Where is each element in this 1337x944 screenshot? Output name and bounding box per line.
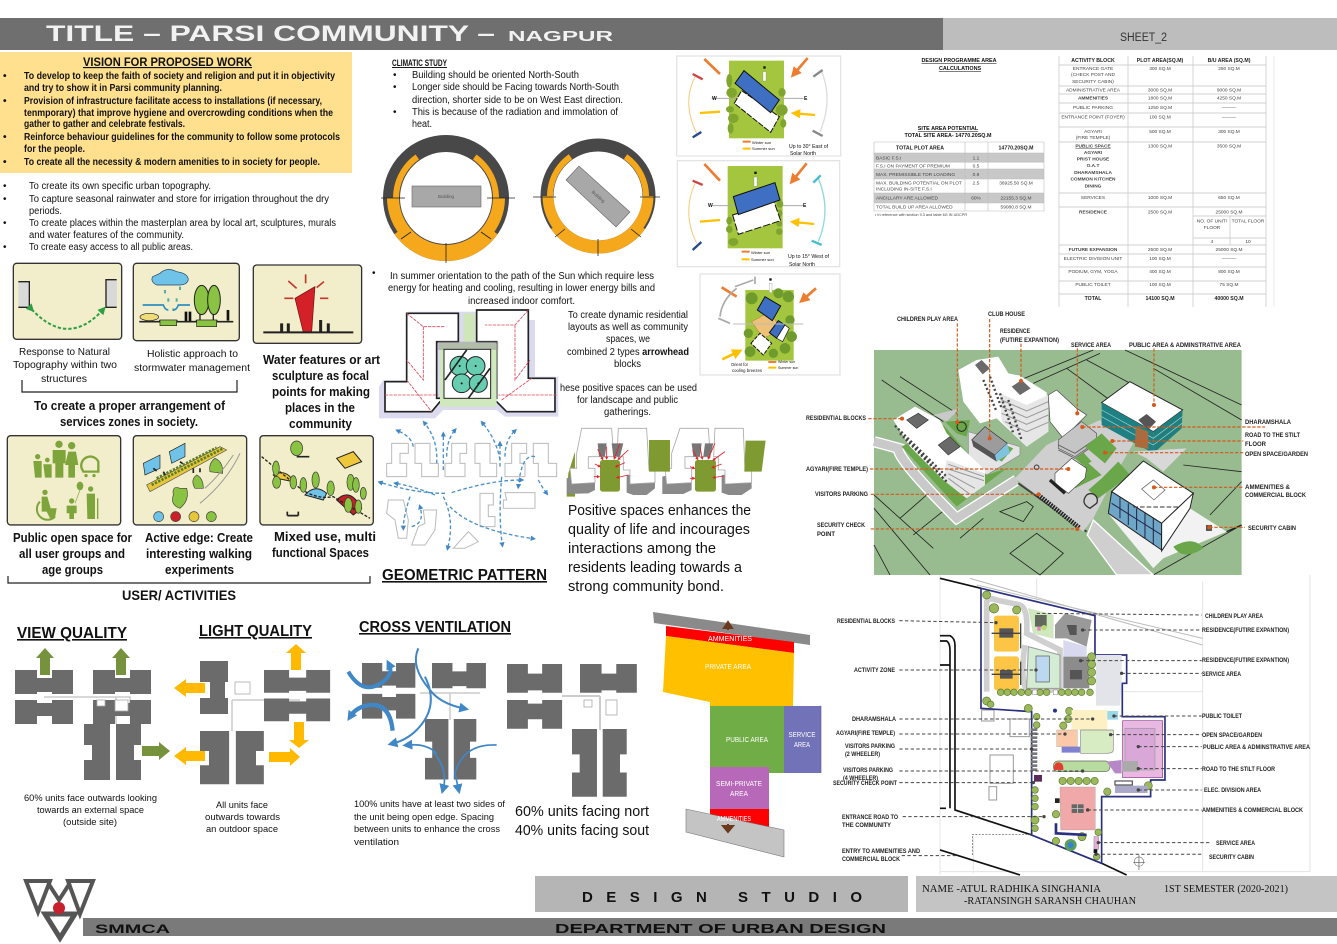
heading: services zones: To create a proper arrangement of bbox=[34, 399, 226, 413]
text: positive spaces benefit: strong community bond. bbox=[568, 579, 724, 595]
text block: urban objectives: • bbox=[3, 194, 7, 205]
heading: site area potential: TOTAL SITE AREA- 14770.20SQ.M bbox=[905, 133, 992, 139]
table: activity block areas: ENTRANCE POINT (FOYER) bbox=[1061, 114, 1125, 120]
table: activity block areas: 40000 SQ.M bbox=[1214, 296, 1244, 302]
diagram: unit facing bbox=[507, 664, 637, 797]
text: stormwater caption: stormwater management bbox=[134, 362, 250, 374]
residential tower cluster, right bbox=[958, 357, 1048, 447]
sketch: arrowhead block plan bbox=[379, 310, 558, 418]
labels: site master plan: PUBLIC TOILET bbox=[1202, 714, 1242, 720]
heading: cross ventilation: CROSS VENTILATION bbox=[359, 619, 511, 636]
diagram: site zoning: AREA bbox=[794, 742, 810, 749]
diagram: 3D axonometric view bbox=[868, 319, 1265, 575]
labels: 3D view: SERVICE AREA bbox=[1071, 343, 1112, 349]
footer bar: DEPARTMENT OF URBAN DESIGN bbox=[555, 921, 886, 936]
title bar: TITLE – PARSI COMMUNITY – bbox=[46, 21, 495, 46]
footer bar bbox=[83, 918, 1337, 936]
text block: urban objectives: • bbox=[3, 242, 7, 253]
table: activity block areas: DINING bbox=[1085, 184, 1102, 190]
text: natural topography caption: Topography within two bbox=[13, 359, 117, 371]
labels: 3D view: CHILDREN PLAY AREA bbox=[897, 317, 959, 323]
text: water features caption: Water features or art bbox=[263, 353, 381, 367]
text: positive spaces benefit: interactions among the bbox=[568, 541, 716, 557]
table: activity block areas: NO. OF UNIT/ bbox=[1197, 218, 1228, 224]
diagram: solar orientation 30 east: Winter sun bbox=[752, 140, 771, 145]
labels: site master plan: ELEC. DIVISION AREA bbox=[1204, 788, 1262, 794]
table: site area potential: TOTAL BUILD UP AREA ALLOWED bbox=[876, 204, 953, 210]
table: site area potential: BASIC F.S.I bbox=[876, 156, 901, 162]
labels: site master plan: SECURITY CHECK POINT bbox=[833, 781, 897, 787]
table: activity block areas: 1800 SQ.M bbox=[1148, 96, 1172, 102]
table: activity block areas: 9000 SQ.M bbox=[1217, 88, 1241, 94]
diagram: orient for cooling breezes bbox=[700, 274, 840, 375]
diagram: solar orientation 15 west: Up to 15° West of bbox=[788, 254, 830, 260]
table: activity block areas: 3500 SQ.M bbox=[1217, 144, 1241, 150]
text: positive spaces benefit: residents leading towards a bbox=[568, 560, 743, 576]
panel: vision for proposed work: • bbox=[3, 132, 7, 143]
text block: climatic study: • bbox=[393, 82, 397, 93]
diagram: site zoning: AMMENITIES bbox=[708, 636, 752, 643]
diagram: site zoning: PRIVATE AREA bbox=[705, 664, 751, 671]
labels: 3D view: FLOOR bbox=[1245, 442, 1267, 448]
heading: design programme area calculations: CALCULATIONS bbox=[939, 66, 981, 72]
table: activity block areas: AMMENITIES bbox=[1078, 96, 1109, 102]
text: cross ventilation caption: 100% units have at least two sides of bbox=[354, 799, 505, 810]
text block: climatic study bbox=[392, 58, 623, 130]
table: activity block areas: 300 SQ.M bbox=[1218, 129, 1240, 135]
labels: site master plan: AMMENITIES & COMMERCIAL BLOCK bbox=[1202, 808, 1304, 814]
diagram: solar orientation 30 east: W bbox=[712, 96, 717, 102]
text: user groups caption: Public open space for bbox=[13, 531, 132, 545]
text: summer orientation: increased indoor comfort. bbox=[468, 296, 575, 307]
table: activity block areas: ENTRANCE GATE bbox=[1073, 66, 1113, 72]
labels: 3D view: AMMENITIES & bbox=[1245, 485, 1291, 491]
heading: site area potential: SITE AREA POTENTIAL bbox=[918, 126, 979, 132]
labels: site master plan: (4 WHEELER) bbox=[843, 776, 878, 782]
chart: sun path orientation 2 bbox=[533, 145, 660, 256]
text: positive spaces benefit: Positive spaces enhances the bbox=[568, 503, 751, 519]
panel: student names and semester: NAME -ATUL RADHIKA SINGHANIA bbox=[922, 883, 1101, 895]
title bar bbox=[0, 18, 1337, 50]
text: dynamic layouts: combined 2 types arrowhead bbox=[567, 347, 689, 358]
text: dynamic layouts: To create dynamic residential bbox=[568, 310, 688, 321]
table: site area potential: • In reference with section 9.3 and table 6G IN UDCPR bbox=[875, 213, 967, 217]
labels: 3D view: RESIDENCE bbox=[1000, 329, 1030, 335]
text: stormwater caption: Holistic approach to bbox=[147, 348, 238, 360]
table: activity block areas: 300 SQ.M bbox=[1149, 66, 1171, 72]
heading: view quality: VIEW QUALITY bbox=[17, 625, 127, 642]
table: activity block areas: 2500 SQ.M bbox=[1148, 210, 1172, 216]
heading: design programme area calculations: DESIGN PROGRAMME AREA bbox=[922, 58, 997, 64]
labels: site master plan: SERVICE AREA bbox=[1216, 841, 1256, 847]
diagram: geometric pattern flow bbox=[380, 423, 557, 548]
text: active edge caption: Active edge: Create bbox=[145, 531, 253, 545]
icon: sculpture card bbox=[253, 265, 362, 343]
table: activity block areas: (CHECK POST AND bbox=[1071, 72, 1115, 78]
table: site area potential: 0.9 bbox=[973, 172, 980, 178]
chart: sun path orientation 1: Building bbox=[438, 194, 455, 199]
table: site area potential: 14770.20SQ.M bbox=[999, 146, 1033, 152]
diagram: solar orientation 30 east bbox=[677, 56, 841, 157]
chart: sun path orientation 2: Building bbox=[591, 189, 606, 204]
heading: design programme area calculations bbox=[922, 58, 997, 72]
diagram: solar orientation 30 east: Solar North bbox=[790, 151, 816, 157]
text: cross ventilation caption: between units to enhance the cross bbox=[354, 824, 500, 835]
text block: climatic study: direction, shorter side to be on West East direction. bbox=[412, 95, 623, 106]
diagram: site zoning: AMMENITIES bbox=[717, 816, 751, 823]
panel: student names and semester: -RATANSINGH SARANSH CHAUHAN bbox=[964, 895, 1136, 907]
table: activity block areas: 100 SQ.M bbox=[1149, 256, 1171, 262]
logo bbox=[26, 881, 93, 938]
table: activity block areas: 500 SQ.M bbox=[1149, 129, 1171, 135]
panel: vision for proposed work bbox=[0, 52, 352, 173]
heading: geometric pattern: GEOMETRIC PATTERN bbox=[382, 567, 547, 584]
text block: climatic study: Building should be oriented North-South bbox=[412, 70, 579, 81]
text: unit facing percentages bbox=[515, 803, 650, 839]
labels: site master plan: VISITORS PARKING bbox=[845, 744, 895, 750]
table: site area potential: MAX. BUILDING POTENTIAL ON PLOT bbox=[876, 180, 962, 186]
text block: climatic study: heat. bbox=[412, 119, 432, 130]
panel: student names and semester bbox=[916, 876, 1337, 912]
table: site area potential: 60% bbox=[971, 196, 982, 202]
labels: 3D view bbox=[806, 312, 1308, 538]
labels: 3D view: PUBLIC AREA & ADMINSTRATIVE AREA bbox=[1129, 343, 1242, 349]
text: light quality caption: All units face bbox=[216, 800, 268, 811]
text: light quality caption bbox=[205, 800, 280, 835]
table: activity block areas: ADMINISTRATIVE AREA bbox=[1066, 88, 1121, 94]
table: activity block areas bbox=[1059, 56, 1274, 307]
table: activity block areas: ——— bbox=[1222, 116, 1236, 120]
table: activity block areas: 1000 SQ.M bbox=[1148, 195, 1172, 201]
labels: site master plan: PUBLIC AREA & ADMINSTRATIVE AREA bbox=[1203, 745, 1311, 751]
text: positive spaces use: hese positive spaces can be used bbox=[560, 383, 697, 394]
table: activity block areas: ——— bbox=[1222, 257, 1236, 262]
text: dynamic layouts: blocks bbox=[614, 359, 641, 370]
diagram: orient for cooling breezes: Winter sun bbox=[778, 360, 795, 364]
labels: site master plan: OPEN SPACE/GARDEN bbox=[1202, 733, 1262, 739]
text: water features caption: places in the bbox=[285, 401, 355, 415]
table: activity block areas: 25000 SQ.M bbox=[1216, 210, 1242, 216]
residential tower cluster, left bbox=[893, 407, 985, 498]
icon: natural topography card bbox=[13, 263, 122, 339]
heading: services zones: services zones in society. bbox=[60, 415, 198, 429]
text: dynamic layouts: layouts as well as community bbox=[568, 322, 688, 333]
text: cross ventilation caption: the unit being open edge. Spacing bbox=[354, 812, 494, 823]
text: user groups caption: age groups bbox=[42, 563, 103, 577]
text: positive spaces use: gatherings. bbox=[604, 407, 651, 418]
labels: 3D view: VISITORS PARKING bbox=[815, 492, 868, 498]
labels: 3D view: AGYARI(FIRE TEMPLE) bbox=[806, 467, 868, 473]
chart: sun path orientation 1 bbox=[381, 144, 515, 263]
table: activity block areas: ACTIVITY BLOCK bbox=[1071, 58, 1115, 64]
text: active edge caption: interesting walking bbox=[146, 547, 252, 561]
table: activity block areas: DHARAMSHALA bbox=[1074, 170, 1112, 176]
labels: site master plan: SERVICE AREA bbox=[1202, 672, 1242, 678]
heading: site area potential bbox=[905, 126, 992, 139]
labels: site master plan: CHILDREN PLAY AREA bbox=[1205, 614, 1264, 620]
text: view quality caption: 60% units face outwards looking bbox=[24, 793, 157, 804]
table: activity block areas: PUBLIC TOILET bbox=[1075, 282, 1111, 288]
panel: design studio: DESIGN STUDIO bbox=[582, 889, 862, 906]
table: activity block areas: 800 SQ.M bbox=[1218, 269, 1240, 275]
text block: urban objectives: • bbox=[3, 181, 7, 192]
diagram: site zoning: SEMI-PRIVATE bbox=[716, 781, 762, 788]
diagram: orient for cooling breezes: Orient for bbox=[731, 362, 748, 367]
text: water features caption bbox=[263, 353, 381, 431]
text: natural topography caption bbox=[13, 346, 117, 385]
table: activity block areas: FLOOR bbox=[1204, 225, 1221, 231]
table: site area potential: 22155.3 SQ.M bbox=[1001, 196, 1031, 202]
text: positive spaces benefit bbox=[568, 503, 751, 595]
labels: 3D view: ROAD TO THE STILT bbox=[1245, 433, 1300, 439]
diagram: solar orientation 30 east: Up to 30° East of bbox=[789, 144, 829, 150]
text: dynamic layouts bbox=[567, 310, 689, 370]
text: light quality caption: outwards towards bbox=[205, 812, 280, 823]
labels: 3D view: COMMERCIAL BLOCK bbox=[1245, 493, 1307, 499]
labels: site master plan: DHARAMSHALA bbox=[852, 717, 897, 723]
labels: site master plan: VISITORS PARKING bbox=[843, 768, 893, 774]
table: activity block areas: 650 SQ.M bbox=[1218, 195, 1240, 201]
diagram: site zoning: AREA bbox=[730, 791, 748, 798]
panel: vision for proposed work: • bbox=[3, 96, 7, 107]
icon: active edge card bbox=[133, 436, 247, 525]
icon: mixed use card bbox=[260, 436, 373, 525]
text block: urban objectives: periods. bbox=[29, 206, 62, 217]
text block: urban objectives: To capture seasonal rainwater and store for irrigation throughout the dry bbox=[29, 194, 329, 205]
table: site area potential: ANCILLARY ARE ALLOWED bbox=[876, 196, 938, 202]
diagram: orient for cooling breezes: Summer sun bbox=[778, 366, 798, 370]
table: activity block areas: 10 bbox=[1245, 239, 1251, 245]
labels: site master plan: THE COMMUNITY bbox=[842, 823, 891, 829]
labels: 3D view: (FUTIRE EXPANTION) bbox=[1000, 338, 1059, 344]
table: activity block areas: 4250 SQ.M bbox=[1217, 96, 1241, 102]
table: activity block areas: 4 bbox=[1211, 239, 1214, 245]
text: active edge caption bbox=[145, 531, 253, 577]
labels: site master plan: RESIDENCE(FUTIRE EXPANTION) bbox=[1202, 628, 1289, 634]
panel: vision for proposed work: • bbox=[3, 157, 7, 168]
text block: climatic study: This is because of the radiation and immolation of bbox=[412, 107, 618, 118]
labels: site master plan: ENTRANCE ROAD TO bbox=[842, 815, 898, 821]
labels: 3D view: CLUB HOUSE bbox=[988, 312, 1025, 318]
diagram: view quality bbox=[15, 648, 170, 780]
text block: urban objectives: To create easy access to all public areas. bbox=[29, 242, 193, 253]
panel: vision for proposed work: Provision of infrastructure facilitate access to installations (if necessary, bbox=[24, 96, 322, 107]
text: active edge caption: experiments bbox=[165, 563, 234, 577]
text: positive spaces use: for landscape and public bbox=[577, 395, 678, 406]
text block: urban objectives: To create places within the masterplan area by local art, sculptures, murals bbox=[29, 218, 336, 229]
table: activity block areas: PLOT AREA(SQ.M) bbox=[1137, 58, 1184, 64]
text: summer orientation bbox=[372, 268, 655, 307]
table: activity block areas: O.A.T bbox=[1087, 163, 1099, 169]
table: activity block areas: PUBLIC SPACE bbox=[1075, 144, 1111, 150]
text: mixed use caption bbox=[272, 530, 376, 560]
text block: climatic study: CLIMATIC STUDY bbox=[392, 58, 447, 69]
table: site area potential: 0.5 bbox=[973, 164, 980, 170]
table: activity block areas: PODIUM, GYM, YOGA bbox=[1068, 269, 1118, 275]
table: activity block areas: 2500 SQ.M bbox=[1148, 247, 1172, 253]
panel: vision for proposed work: To develop to keep the faith of society and religion and put it in objectivity bbox=[24, 71, 335, 82]
table: activity block areas: 75 SQ.M bbox=[1220, 282, 1238, 288]
labels: 3D view: OPEN SPACE/GARDEN bbox=[1245, 452, 1308, 458]
diagram: site master plan bbox=[820, 575, 1310, 875]
text: mixed use caption: Mixed use, multi bbox=[274, 530, 376, 544]
table: site area potential: F.S.I ON PAYMENT OF PREMIUM bbox=[876, 164, 950, 170]
text: view quality caption bbox=[24, 793, 157, 828]
table: site area potential bbox=[874, 142, 1044, 217]
diagram: orient for cooling breezes: cooling breezes bbox=[732, 368, 763, 373]
text: user groups caption bbox=[13, 531, 132, 577]
panel: vision for proposed work: and try to show it in Parsi community planning. bbox=[24, 83, 222, 94]
table: site area potential: TOTAL PLOT AREA bbox=[896, 146, 944, 152]
text: user groups caption: all user groups and bbox=[19, 547, 125, 561]
text: stormwater caption bbox=[134, 348, 250, 374]
heading: services zones bbox=[34, 399, 226, 429]
table: activity block areas: 100 SQ.M bbox=[1149, 282, 1171, 288]
table: activity block areas: 25000 SQ.M bbox=[1216, 247, 1242, 253]
labels: site master plan: (2 WHEELER) bbox=[845, 752, 880, 758]
table: activity block areas: AGYARI bbox=[1084, 150, 1103, 156]
panel: vision for proposed work: To create all the necessity & modern amenities to in society for people. bbox=[24, 157, 320, 168]
labels: site master plan: COMMERCIAL BLOCK bbox=[842, 857, 901, 863]
table: site area potential: MAX. PREMISSIBLE TDR LOADING bbox=[876, 172, 955, 178]
text: unit facing percentages: 40% units facing sout bbox=[515, 822, 650, 839]
table: activity block areas: 3000 SQ.M bbox=[1148, 88, 1172, 94]
labels: site master plan: RESIDENTIAL BLOCKS bbox=[837, 619, 895, 625]
table: site area potential: INCLUDING IN-SITE F.S.I bbox=[876, 186, 932, 192]
table: activity block areas: ELECTRIC DIVISION UNIT bbox=[1064, 256, 1122, 262]
labels: site master plan: RESIDENCE(FUTIRE EXPANTION) bbox=[1202, 658, 1289, 664]
labels: 3D view: SECURITY CHECK bbox=[817, 523, 866, 529]
text block: urban objectives: • bbox=[3, 218, 7, 229]
table: activity block areas: TOTAL FLOOR bbox=[1232, 218, 1265, 224]
labels: site master plan: AGYARI(FIRE TEMPLE) bbox=[836, 731, 895, 737]
labels: 3D view: DHARAMSHALA bbox=[1245, 420, 1292, 426]
panel: vision for proposed work: tenmporary) that improve hygiene and overcrowding conditions when the bbox=[24, 108, 333, 119]
table: activity block areas: FUTURE EXPANSION bbox=[1069, 247, 1118, 253]
panel: vision for proposed work: gather to gather and celebrate festivals. bbox=[24, 119, 185, 130]
table: activity block areas: PUBLIC PARKING bbox=[1073, 105, 1113, 111]
text: light quality caption: an outdoor space bbox=[206, 824, 278, 835]
table: activity block areas: SECURITY CABIN) bbox=[1072, 79, 1114, 85]
diagram: site zoning bbox=[653, 612, 821, 857]
table: activity block areas: 400 SQ.M bbox=[1149, 269, 1171, 275]
diagram: site zoning: SERVICE bbox=[788, 732, 816, 739]
text: summer orientation: • bbox=[372, 268, 376, 279]
text: water features caption: points for making bbox=[272, 385, 370, 399]
text: view quality caption: towards an external space bbox=[37, 805, 144, 816]
diagram: solar orientation 15 west: W bbox=[708, 203, 713, 209]
diagram: solar orientation 30 east: Summer sun bbox=[752, 146, 775, 151]
text block: climatic study: Longer side should be Facing towards North-South bbox=[412, 82, 619, 93]
table: activity block areas: RESIDENCE bbox=[1079, 210, 1108, 216]
text: water features caption: community bbox=[289, 417, 352, 431]
table: activity block areas: COMMON KITCHEN bbox=[1070, 176, 1116, 182]
text: natural topography caption: Response to Natural bbox=[19, 346, 110, 358]
diagram: light quality bbox=[174, 644, 330, 784]
diagram: cross ventilation bbox=[348, 648, 497, 788]
table: activity block areas: 1300 SQ.M bbox=[1148, 144, 1172, 150]
labels: site master plan: SECURITY CABIN bbox=[1209, 855, 1254, 861]
panel: vision for proposed work: • bbox=[3, 71, 7, 82]
table: activity block areas: (FIRE TEMPLE) bbox=[1076, 135, 1111, 141]
text: positive spaces benefit: quality of life and incourages bbox=[568, 522, 750, 538]
bracket bbox=[22, 380, 237, 392]
text: cross ventilation caption: ventilation bbox=[354, 837, 399, 848]
text: dynamic layouts: spaces, we bbox=[606, 334, 650, 345]
diagram: solar orientation 15 west: E bbox=[803, 203, 807, 209]
text block: urban objectives: and water features of the community. bbox=[29, 230, 184, 241]
panel: design studio bbox=[535, 876, 908, 912]
text: natural topography caption: structures bbox=[41, 373, 87, 385]
table: activity block areas: B/U AREA (SQ.M) bbox=[1208, 58, 1251, 64]
diagram: solar orientation 15 west bbox=[677, 161, 840, 268]
table: activity block areas: TOTAL bbox=[1085, 296, 1102, 302]
footer bar: SMMCA bbox=[95, 922, 171, 936]
labels: site master plan: ROAD TO THE STILT FLOOR bbox=[1202, 767, 1276, 773]
labels: 3D view: POINT bbox=[817, 532, 835, 538]
diagram: positive spaces bbox=[567, 428, 766, 497]
text block: urban objectives: To create its own specific urban topography. bbox=[29, 181, 211, 192]
text block: climatic study: • bbox=[393, 70, 397, 81]
table: activity block areas: SERVICES bbox=[1081, 195, 1105, 201]
text: unit facing percentages: 60% units facing nort bbox=[515, 803, 650, 820]
table: site area potential: 59080.8 SQ.M bbox=[1001, 204, 1031, 210]
panel: vision for proposed work: Reinforce behaviour guidelines for the community to follow some protocols bbox=[24, 132, 340, 143]
text: water features caption: sculpture as focal bbox=[272, 369, 369, 383]
sheet number: SHEET_2 bbox=[1120, 32, 1167, 44]
table: site area potential: 2.5 bbox=[973, 180, 980, 186]
text: view quality caption: (outside site) bbox=[63, 817, 117, 828]
table: activity block areas: ——— bbox=[1222, 106, 1236, 111]
diagram: solar orientation 15 west: Summer sun bbox=[751, 257, 774, 262]
icon: stormwater card bbox=[133, 263, 239, 341]
heading: user activities: USER/ ACTIVITIES bbox=[122, 587, 236, 603]
diagram: site zoning: PUBLIC AREA bbox=[726, 737, 768, 744]
diagram: solar orientation 30 east: E bbox=[804, 96, 808, 102]
table: site area potential: 1.1 bbox=[973, 156, 980, 162]
labels: site master plan: ENTRY TO AMMENITIES AND bbox=[842, 849, 921, 855]
panel: vision for proposed work: for the people. bbox=[24, 144, 85, 155]
panel: student names and semester: 1ST SEMESTER (2020-2021) bbox=[1164, 883, 1288, 895]
panel: vision for proposed work: VISION FOR PROPOSED WORK bbox=[83, 57, 253, 69]
labels: 3D view: SECURITY CABIN bbox=[1248, 526, 1296, 532]
table: activity block areas: PRIST HOUSE bbox=[1077, 156, 1110, 162]
labels: site master plan bbox=[833, 614, 1311, 863]
table: activity block areas: 14100 SQ.M bbox=[1145, 296, 1175, 302]
text: positive spaces use bbox=[560, 383, 697, 418]
text: summer orientation: In summer orientation to the path of the Sun which require less bbox=[390, 271, 654, 282]
diagram: solar orientation 15 west: Winter sun bbox=[751, 250, 770, 255]
table: activity block areas: 100 SQ.M bbox=[1149, 114, 1171, 120]
table: activity block areas: AGYARI bbox=[1084, 129, 1102, 135]
text: mixed use caption: functional Spaces bbox=[272, 546, 369, 560]
text block: urban objectives bbox=[3, 181, 336, 253]
diagram: solar orientation 15 west: Solar North bbox=[789, 262, 815, 268]
labels: site master plan: ACTIVITY ZONE bbox=[854, 668, 895, 674]
heading: light quality: LIGHT QUALITY bbox=[199, 623, 312, 640]
table: site area potential: 36925.50 SQ.M bbox=[999, 180, 1033, 186]
title bar: NAGPUR bbox=[508, 28, 613, 45]
table: activity block areas: 1250 SQ.M bbox=[1148, 105, 1172, 111]
text block: climatic study: • bbox=[393, 107, 397, 118]
icon: user groups card bbox=[7, 436, 121, 525]
bracket bbox=[8, 576, 370, 583]
table: activity block areas: 250 SQ.M bbox=[1218, 66, 1240, 72]
text: cross ventilation caption bbox=[354, 799, 505, 848]
labels: 3D view: RESIDENTIAL BLOCKS bbox=[806, 416, 866, 422]
text: summer orientation: energy for heating and cooling, resulting in lower energy bills and bbox=[388, 283, 655, 294]
